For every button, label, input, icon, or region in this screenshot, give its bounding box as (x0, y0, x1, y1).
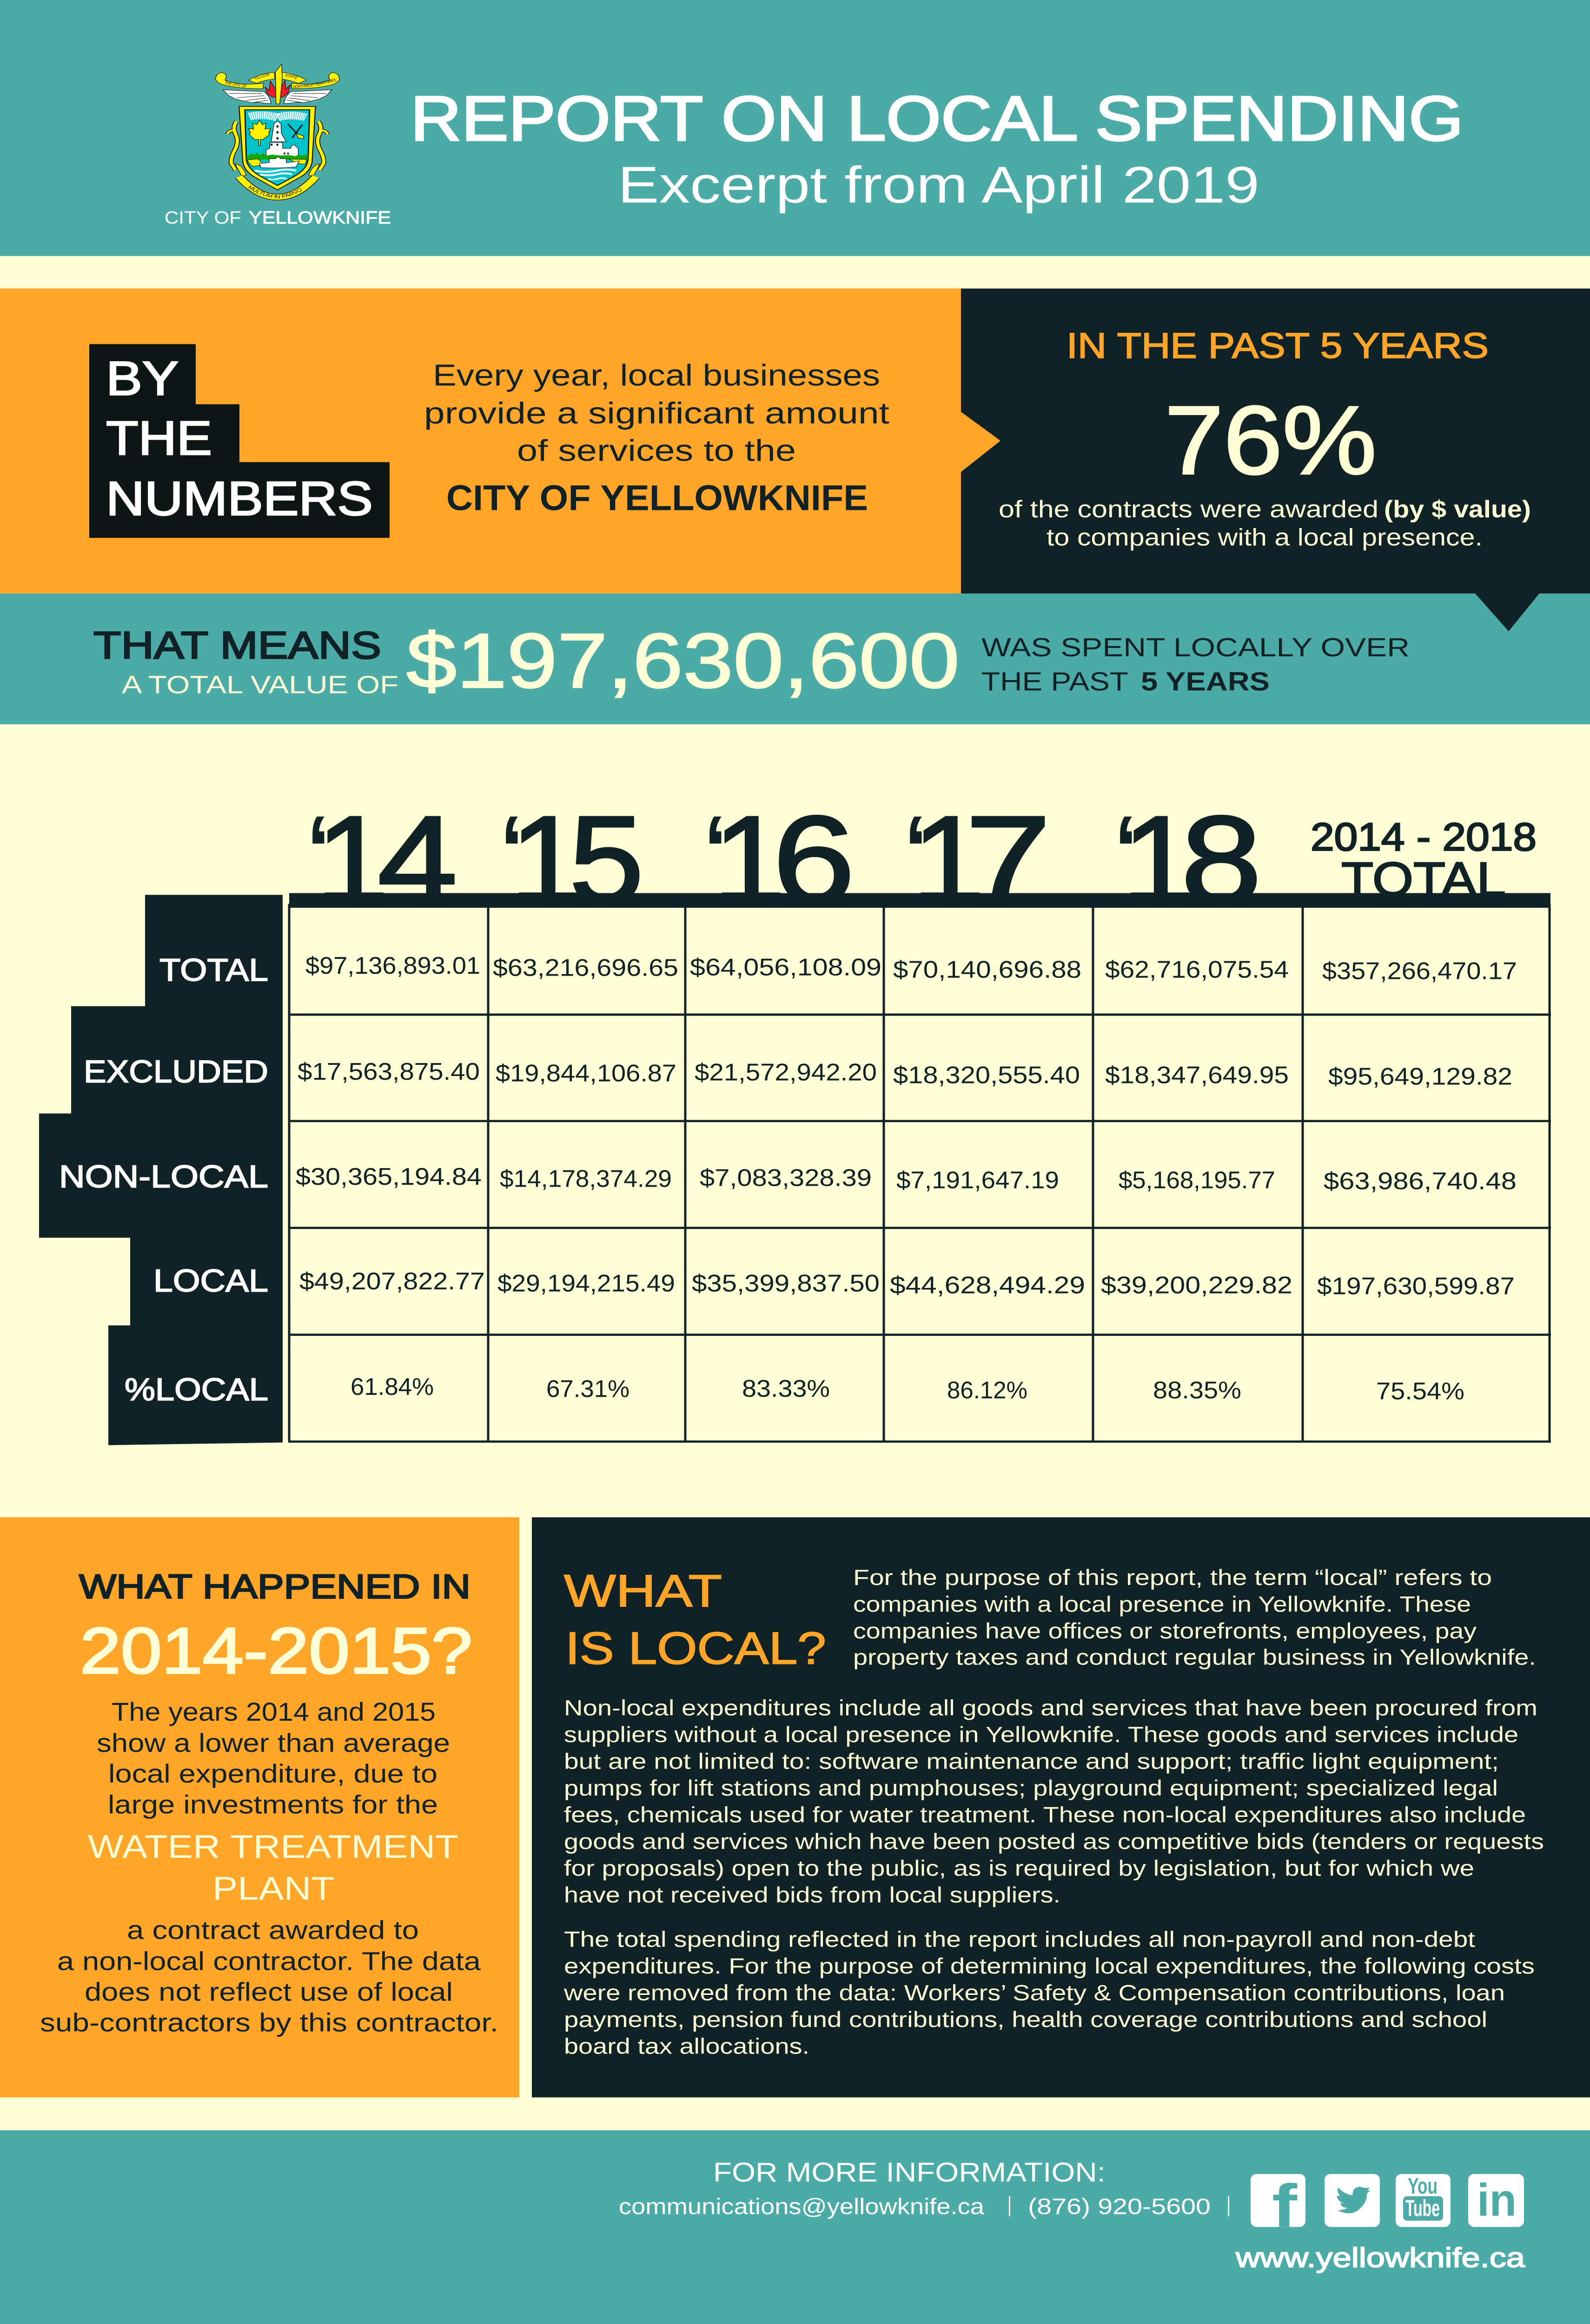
column heading: total (1311, 815, 1537, 906)
row labels: TOTAL (159, 952, 268, 988)
non-local paragraph: fees, chemicals used for water treatment. These non-local expenditures also include (564, 1803, 1526, 1827)
panel heading (564, 1566, 826, 1674)
column heading: 17: 7 (965, 791, 1051, 930)
table row: excluded: $19,844,106.87 (496, 1060, 676, 1087)
column heading: 18 (1114, 791, 1262, 930)
table row: non-local: $14,178,374.29 (500, 1166, 672, 1192)
column heading: 15 (500, 791, 644, 930)
non-local paragraph: suppliers without a local presence in Yellowknife. These goods and services include (564, 1723, 1518, 1747)
table row: total: $357,266,470.17 (1322, 957, 1517, 984)
header panel (0, 0, 1590, 256)
table row: local: $44,628,494.29 (890, 1272, 1085, 1299)
total spending paragraph: were removed from the data: Workers’ Safety & Compensation contributions, loan (563, 1981, 1505, 2005)
non-local paragraph: pumps for lift stations and pumphouses; playground equipment; specialized legal (564, 1776, 1498, 1801)
column heading: 14 (307, 791, 457, 930)
non-local paragraph (564, 1697, 1544, 1908)
row labels: EXCLUDED (84, 1054, 268, 1089)
contract text: does not reflect use of local (85, 1978, 453, 2007)
intro text: CITY OF YELLOWKNIFE (446, 478, 868, 518)
contract text: sub-contractors by this contractor. (40, 2009, 498, 2037)
column heading: 18: ‘ (1114, 796, 1138, 903)
table row: local: $35,399,837.50 (692, 1270, 880, 1297)
website url: www.yellowknife.ca (1235, 2242, 1525, 2273)
column heading: 18: 8 (1181, 791, 1262, 930)
definition paragraph: companies have offices or storefronts, employees, pay (853, 1619, 1477, 1644)
column heading: 16: ‘ (704, 796, 727, 903)
contact details: communications@yellowknife.ca (619, 2194, 985, 2219)
panel heading: IS LOCAL? (565, 1623, 826, 1674)
text: was spent locally: THE PAST (981, 667, 1128, 696)
table (39, 791, 1551, 1445)
explanation text: large investments for the (108, 1790, 438, 1819)
table row: total: $97,136,893.01 (305, 952, 480, 979)
definition paragraph (853, 1566, 1536, 1670)
table row: excluded: $18,347,649.95 (1105, 1062, 1289, 1089)
table row: local: $39,200,229.82 (1101, 1272, 1292, 1299)
logo wordmark: CITY OF (165, 208, 241, 228)
panel: what is local (532, 1517, 1590, 2097)
intro text: provide a significant amount (424, 396, 890, 430)
table row: total: $62,716,075.54 (1105, 956, 1289, 983)
text: was spent locally (981, 633, 1410, 696)
table row: total (305, 952, 1517, 984)
column heading: 17 (904, 791, 1051, 930)
table row: excluded: $21,572,942.20 (695, 1059, 877, 1086)
icon: city of Yellowknife coat of arms: YELLOW (253, 72, 271, 81)
contact details (619, 2194, 1229, 2219)
table row: non-local (296, 1163, 1517, 1195)
footer heading: FOR MORE INFORMATION: (713, 2157, 1106, 2187)
heading: by the numbers: THE (106, 411, 212, 465)
table row: non-local: $7,191,647.19 (896, 1167, 1059, 1194)
total spending paragraph: payments, pension fund contributions, health coverage contributions and school (564, 2008, 1487, 2032)
icon: city of Yellowknife coat of arms (215, 64, 339, 199)
explanation text (97, 1698, 450, 1819)
table row: percent local: 86.12% (947, 1377, 1027, 1404)
non-local paragraph: but are not limited to: software maintenance and support; traffic light equipment; (564, 1750, 1499, 1774)
icon: linkedin: in (1477, 2175, 1517, 2226)
intro text: of services to the (517, 434, 796, 468)
icon: youtube: You (1408, 2174, 1438, 2199)
column heading: 14: ‘ (307, 796, 330, 903)
non-local paragraph: Non-local expenditures include all goods and services that have been procured from (564, 1697, 1537, 1720)
contract text: a non-local contractor. The data (57, 1948, 481, 1976)
table row: percent local (351, 1373, 1464, 1405)
table row: percent local: 88.35% (1153, 1377, 1241, 1404)
column heading: 15: ‘ (500, 796, 523, 903)
column heading: 16: 1 (713, 791, 786, 930)
title: REPORT ON LOCAL SPENDING (411, 83, 1464, 154)
logo wordmark: YELLOWKNIFE (249, 208, 391, 228)
table row: local: $29,194,215.49 (497, 1270, 675, 1297)
text: was spent locally: 5 YEARS (1141, 667, 1270, 696)
icon: youtube: Tube (1405, 2195, 1440, 2221)
heading: by the numbers: NUMBERS (106, 472, 373, 526)
icon: facebook (1251, 2174, 1305, 2227)
total spending paragraph: board tax allocations. (564, 2034, 809, 2059)
definition paragraph: property taxes and conduct regular business in Yellowknife. (853, 1645, 1536, 1670)
callout text: of the contracts were awarded (999, 496, 1378, 523)
column heading: 14: 1 (316, 791, 389, 930)
column heading: 17: ‘ (904, 796, 928, 903)
highlight: water treatment plant: PLANT (212, 1870, 334, 1907)
column heading: 15: 1 (510, 791, 583, 930)
column heading: 17: 1 (912, 791, 985, 930)
panel: what happened in 2014-2015 (0, 1517, 519, 2097)
icon: city of Yellowknife coat of arms: THE CITY OF (224, 80, 247, 89)
table row: excluded: $18,320,555.40 (893, 1062, 1080, 1089)
panel heading years: 2014-2015? (80, 1615, 472, 1687)
table row: excluded: $17,563,875.40 (298, 1058, 480, 1085)
table row: non-local: $7,083,328.39 (700, 1165, 872, 1191)
total spending paragraph: expenditures. For the purpose of determining local expenditures, the following costs (564, 1954, 1535, 1979)
definition paragraph: companies with a local presence in Yellowknife. These (853, 1592, 1471, 1617)
callout text: to companies with a local presence. (1047, 524, 1483, 551)
text: that means: THAT MEANS (93, 624, 381, 667)
table row: percent local: 83.33% (742, 1375, 830, 1402)
table row: total: $64,056,108.09 (690, 954, 881, 981)
callout heading: IN THE PAST 5 YEARS (1067, 326, 1489, 366)
row labels (39, 895, 283, 1445)
icon: city of Yellowknife coat of arms: KNIFE (285, 73, 299, 80)
column heading: 16 (704, 791, 855, 930)
contact details: (876) 920-5600 (1028, 2194, 1211, 2219)
text: a total value of: A TOTAL VALUE OF (122, 670, 398, 699)
intro text (424, 359, 890, 518)
contract text: a contract awarded to (127, 1916, 419, 1945)
column heading: 15: 5 (569, 791, 644, 930)
table row: local (299, 1268, 1515, 1300)
icon: city of Yellowknife coat of arms: MULTUM IN PARVO (246, 185, 304, 199)
column heading: 16: 6 (773, 791, 855, 930)
total spending paragraph: The total spending reflected in the report includes all non-payroll and non-debt (564, 1928, 1475, 1952)
icon: city of Yellowknife coat of arms: NORTHWEST TERRITORIES (293, 78, 338, 89)
explanation text: The years 2014 and 2015 (112, 1698, 436, 1727)
table row: total: $63,216,696.65 (493, 955, 678, 981)
column heading: 18: 1 (1122, 791, 1195, 930)
table row: non-local: $30,365,194.84 (296, 1163, 482, 1190)
panel: by the numbers intro (0, 289, 1000, 594)
table row: local: $49,207,822.77 (299, 1268, 485, 1295)
total spending paragraph (563, 1928, 1535, 2059)
logo wordmark (165, 208, 391, 228)
table row: excluded (298, 1058, 1512, 1090)
table row: total: $70,140,696.88 (893, 956, 1081, 983)
column heading: total: 2014 - 2018 (1311, 815, 1537, 859)
text: was spent locally: WAS SPENT LOCALLY OVER (981, 633, 1410, 662)
table row: percent local: 75.54% (1376, 1378, 1464, 1405)
table row: percent local: 61.84% (351, 1373, 434, 1400)
row labels: %LOCAL (125, 1372, 268, 1407)
non-local paragraph: have not received bids from local suppliers. (564, 1883, 1060, 1908)
stat: 76 percent: 76% (1165, 386, 1377, 495)
table row: percent local: 67.31% (546, 1376, 629, 1402)
highlight: water treatment plant: WATER TREATMENT (88, 1829, 458, 1865)
subtitle: Excerpt from April 2019 (618, 156, 1259, 214)
highlight: water treatment plant (88, 1829, 458, 1907)
table row: local: $197,630,599.87 (1317, 1273, 1515, 1300)
explanation text: show a lower than average (97, 1729, 450, 1758)
callout text (999, 496, 1531, 551)
table row: non-local: $5,168,195.77 (1119, 1167, 1275, 1194)
icon: youtube (1396, 2174, 1451, 2227)
panel heading: WHAT (564, 1566, 722, 1616)
icon: facebook: f (1272, 2172, 1297, 2240)
column heading: total: TOTAL (1341, 852, 1506, 906)
row labels: NON-LOCAL (59, 1159, 268, 1194)
callout text: (by $ value) (1384, 496, 1531, 523)
icon: twitter (1325, 2174, 1380, 2227)
table row: non-local: $63,986,740.48 (1324, 1168, 1517, 1195)
explanation text: local expenditure, due to (108, 1760, 437, 1789)
heading: by the numbers: BY (106, 352, 179, 405)
non-local paragraph: goods and services which have been posted as competitive bids (tenders or requests (564, 1830, 1544, 1854)
table row: excluded: $95,649,129.82 (1328, 1063, 1512, 1090)
panel heading: WHAT HAPPENED IN (79, 1567, 470, 1605)
contract text (40, 1916, 498, 2037)
panel: in the past 5 years callout (958, 289, 1590, 631)
non-local paragraph: for proposals) open to the public, as is required by legislation, but for which we (564, 1856, 1474, 1881)
band: that means total value (0, 594, 1590, 724)
row labels: LOCAL (153, 1263, 268, 1298)
heading: by the numbers (89, 344, 390, 538)
big number: $197,630,600 (406, 618, 960, 704)
footer (0, 2130, 1590, 2324)
intro text: Every year, local businesses (433, 359, 880, 392)
definition paragraph: For the purpose of this report, the term “local” refers to (853, 1566, 1492, 1590)
column heading: 14: 4 (378, 791, 457, 930)
